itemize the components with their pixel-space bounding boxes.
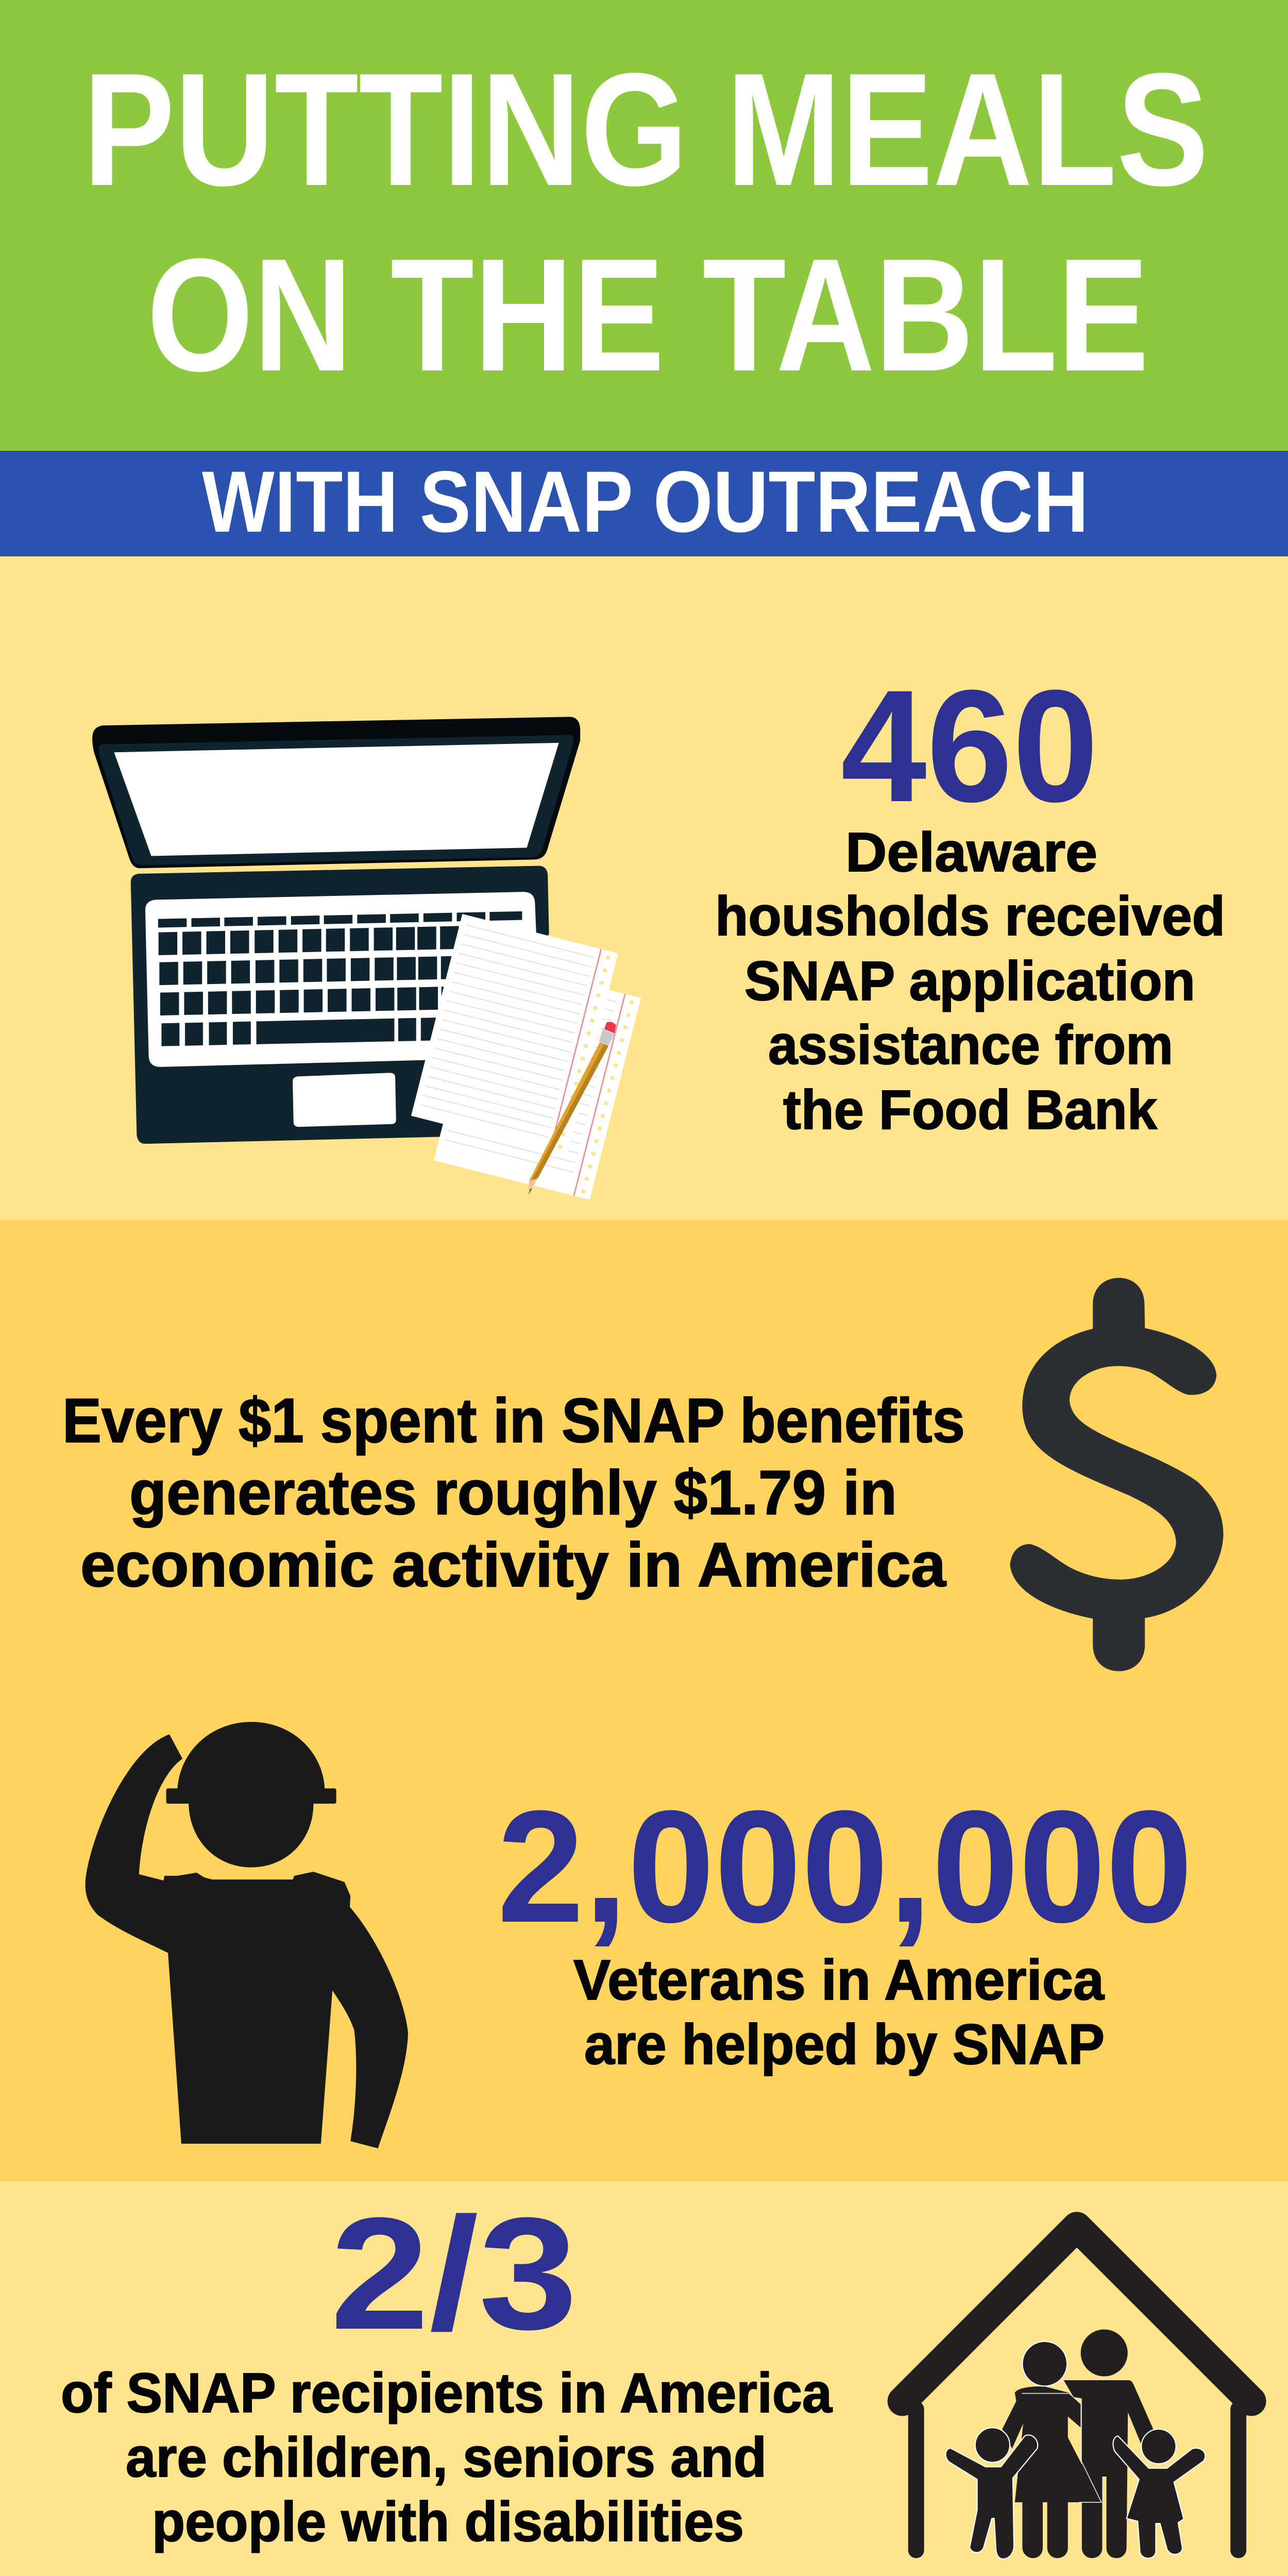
stat: 2/3: 2/3: [330, 2184, 578, 2363]
text: economic activity: Every $1 spent in SNAP benefits: [62, 1385, 965, 1455]
icon: saluting veteran: [86, 1722, 408, 2148]
text: households description: [715, 821, 1225, 1141]
icon: dollar sign: [1010, 1278, 1224, 1671]
text: households description: housholds received: [715, 885, 1225, 947]
icon: pencil: [529, 1022, 616, 1195]
panel: economic activity and veterans: [0, 1220, 1288, 2181]
stat: 2,000,000: 2,000,000: [497, 1777, 1193, 1956]
text: recipients description: [61, 2362, 833, 2553]
text: households description: the Food Bank: [783, 1078, 1158, 1141]
text: recipients description: are children, seniors and: [126, 2426, 767, 2489]
text: households description: assistance from: [768, 1013, 1173, 1076]
text: veterans description: are helped by SNAP: [584, 2013, 1105, 2076]
panel: subtitle band: WITH SNAP OUTREACH: [202, 453, 1089, 550]
text: veterans description: [573, 1948, 1105, 2076]
text: economic activity: [62, 1385, 965, 1600]
stat: 460: 460: [841, 656, 1098, 835]
panel: households: [0, 556, 1288, 1220]
text: economic activity: generates roughly $1.79 in: [129, 1458, 897, 1528]
panel: recipients: [0, 2181, 1288, 2576]
icon: family in house: [902, 2227, 1251, 2559]
title: [83, 40, 1209, 405]
text: economic activity: economic activity in America: [80, 1530, 946, 1600]
panel: title header: [0, 0, 1288, 451]
text: veterans description: Veterans in America: [573, 1948, 1105, 2012]
paper sheet front: [411, 914, 618, 1155]
text: recipients description: of SNAP recipients in America: [61, 2362, 833, 2425]
icon: laptop and paper: [92, 717, 641, 1200]
text: households description: SNAP application: [744, 950, 1195, 1012]
text: households description: Delaware: [845, 821, 1097, 883]
title: ON THE TABLE: [147, 226, 1149, 405]
paper sheet back: [434, 958, 641, 1200]
text: recipients description: people with disabilities: [152, 2490, 744, 2553]
